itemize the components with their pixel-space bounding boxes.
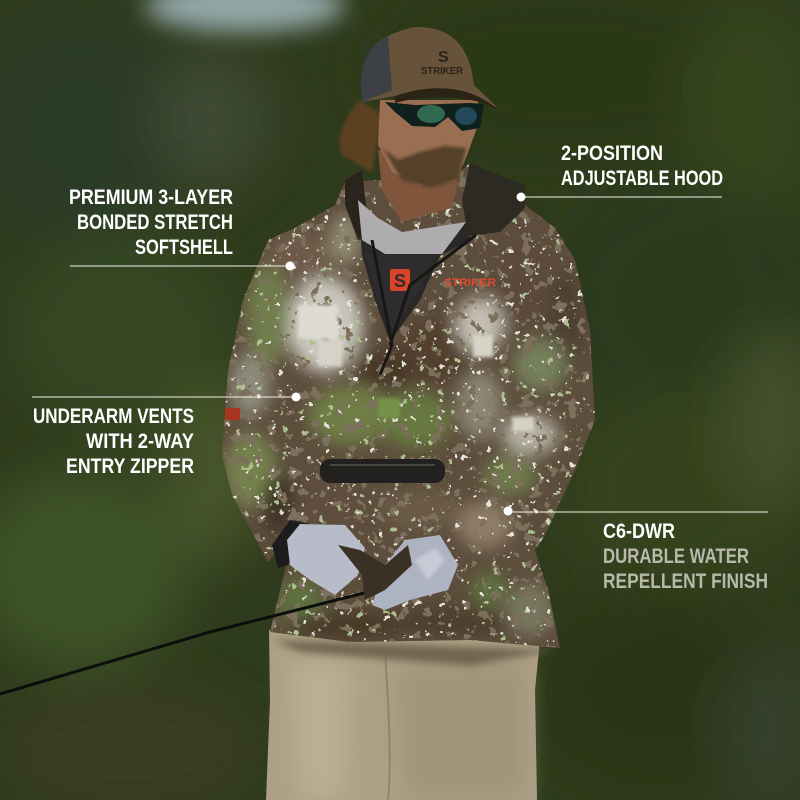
callout text — [561, 142, 723, 190]
head: STRIKER — [421, 66, 464, 77]
gloves — [287, 524, 458, 610]
callout text: BONDED STRETCH — [77, 211, 233, 234]
hair — [340, 100, 382, 172]
sunglasses — [385, 102, 484, 131]
callout text: C6-DWR — [603, 520, 675, 543]
head — [340, 27, 498, 222]
digital speckle — [220, 160, 600, 650]
undershirt and logo — [358, 200, 476, 375]
callout: premium softshell — [69, 186, 294, 270]
beard — [383, 146, 466, 188]
callout text: PREMIUM 3-LAYER — [69, 186, 233, 209]
pants — [266, 630, 555, 800]
callout: C6-DWR finish — [504, 506, 768, 593]
undershirt and logo: S — [394, 271, 406, 291]
hood interior — [345, 170, 375, 240]
callout: underarm vents — [32, 392, 300, 478]
callout text — [69, 186, 233, 259]
fishing rod — [0, 592, 368, 694]
chest pocket — [320, 459, 445, 483]
sleeve cuff left — [272, 520, 310, 568]
brand wordmark: STRIKER — [444, 277, 496, 289]
logo patch on sleeve — [225, 408, 240, 420]
callout text: ADJUSTABLE HOOD — [561, 167, 723, 190]
head: S — [438, 49, 449, 66]
face — [378, 100, 478, 186]
camo patches — [224, 214, 583, 638]
neck — [378, 150, 462, 222]
callout: adjustable hood — [516, 142, 723, 202]
man: fishing angler — [0, 27, 600, 800]
pocket zipper — [330, 464, 435, 466]
jacket — [220, 160, 600, 650]
bright panel on chest — [298, 305, 534, 431]
callout text: WITH 2-WAY — [86, 430, 194, 453]
callout text: UNDERARM VENTS — [33, 405, 194, 428]
callout text: DURABLE WATER — [603, 545, 749, 568]
cap — [361, 27, 498, 108]
callout text: ENTRY ZIPPER — [66, 455, 194, 478]
callout text — [33, 405, 194, 478]
callout text: 2-POSITION — [561, 142, 663, 165]
callout text — [603, 520, 768, 593]
sky gap — [145, 0, 345, 32]
callout text: REPELLENT FINISH — [603, 570, 768, 593]
callout text: SOFTSHELL — [135, 236, 233, 259]
